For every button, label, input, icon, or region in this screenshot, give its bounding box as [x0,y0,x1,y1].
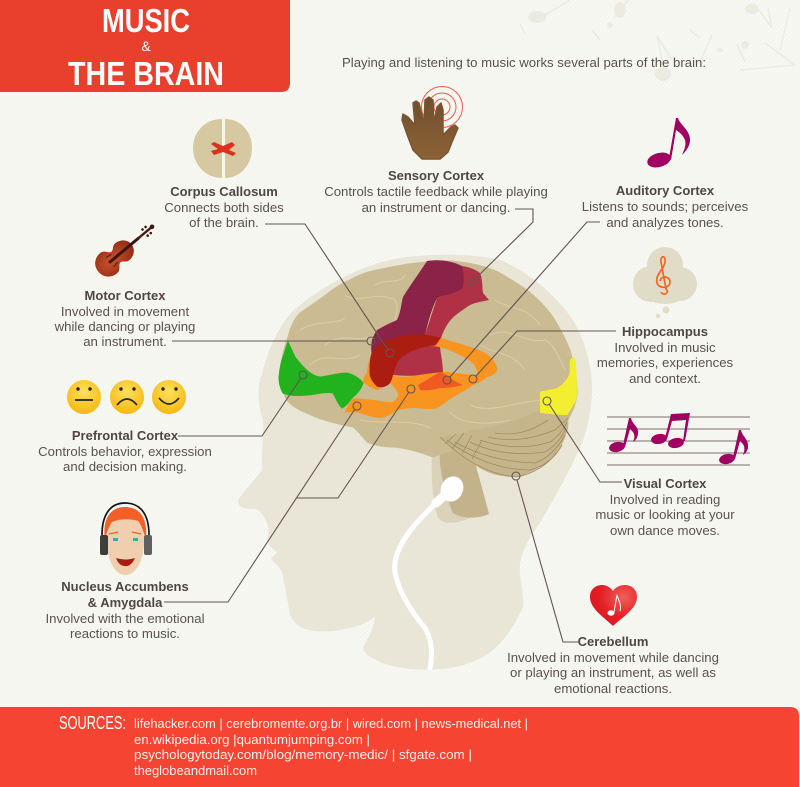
icon: hand with ripples [402,86,462,159]
label: nucleus accumbens and amygdala: reactions to music. [70,626,180,641]
region: auditory cortex (red-orange) [418,372,463,390]
leader line: corpus callosum [265,224,394,357]
leader line: nucleus accumbens [164,402,361,602]
label: sensory cortex: Sensory Cortex [388,168,485,183]
label: motor cortex [54,288,195,349]
icon: face with headphones [100,503,152,575]
label: hippocampus: Hippocampus [622,324,708,339]
icon: thought cloud with treble clef [633,247,697,318]
leader line: cerebellum [512,472,578,642]
icon: staff with notes [607,413,750,466]
label: auditory cortex: Listens to sounds; perceives [582,199,749,214]
label: sensory cortex: an instrument or dancing. [362,200,510,215]
label: nucleus accumbens and amygdala: Nucleus Accumbens [61,579,189,594]
label: motor cortex: Motor Cortex [85,288,166,303]
head silhouette [238,255,592,670]
earbud and cable [395,473,467,668]
icon: music note [646,118,690,170]
label: auditory cortex: and analyzes tones. [606,215,724,230]
label: hippocampus: memories, experiences [597,355,734,370]
brain folds [300,275,565,428]
beamed notes [650,413,690,449]
region: nucleus accumbens, amygdala and hippocampus (orange) [345,335,497,418]
intro text: Playing and listening to music works several parts of the brain: [342,55,706,70]
sources list: psychologytoday.com/blog/memory-medic/ | sfgate.com | [134,747,472,762]
region: motor and sensory cortex [371,260,489,376]
leader line: sensory cortex [468,209,533,286]
sources list [134,716,528,778]
leader line: hippocampus [469,331,616,383]
label: nucleus accumbens and amygdala [45,579,205,641]
footer: sources [0,707,799,787]
region: visual cortex (yellow) [540,358,577,415]
label: hippocampus: and context. [629,371,701,386]
label: auditory cortex [582,183,749,230]
title: MUSIC: MUSIC [102,2,190,39]
label: cerebellum: emotional reactions. [554,681,672,696]
leader line: auditory cortex [443,222,600,384]
label: motor cortex: Involved in movement [61,304,189,319]
label: prefrontal cortex: Controls behavior, expression [38,444,212,459]
label: visual cortex: Involved in reading [610,492,720,507]
label: hippocampus: Involved in music [614,340,716,355]
leader line: visual cortex [543,397,622,482]
neutral face [67,380,101,414]
leader line: prefrontal cortex [178,371,307,436]
happy face [152,380,186,414]
region: overlap (dark red) [370,335,440,387]
icon: split brain [193,119,252,178]
title banner [0,0,290,92]
title: ampersand: & [141,38,151,54]
icon: violin [90,215,162,282]
label: sensory cortex: Controls tactile feedback while playing [324,184,548,199]
label: cerebellum: Cerebellum [578,634,648,649]
brain [280,261,577,457]
label: corpus callosum: Connects both sides [164,200,284,215]
label: prefrontal cortex: Prefrontal Cortex [72,428,179,443]
label: corpus callosum: Corpus Callosum [170,184,278,199]
sources list: theglobeandmail.com [134,763,257,778]
note [608,418,638,454]
title: THE BRAIN: THE BRAIN [68,55,224,92]
label: visual cortex: Visual Cortex [624,476,707,491]
cerebellum [440,409,568,477]
icon: heart with note [590,585,637,626]
label: visual cortex: own dance moves. [610,523,720,538]
label: prefrontal cortex [38,428,212,474]
label: motor cortex: an instrument. [83,334,167,349]
label: cerebellum [507,634,719,696]
label: corpus callosum [164,184,284,230]
label: visual cortex: music or looking at your [595,507,735,522]
label: cerebellum: or playing an instrument, as well as [510,665,716,680]
sad face [110,380,144,414]
label: corpus callosum: of the brain. [189,215,259,230]
label: sensory cortex [324,168,548,215]
label: prefrontal cortex: and decision making. [63,459,187,474]
label: nucleus accumbens and amygdala: Involved with the emotional [45,611,205,626]
sources list: en.wikipedia.org |quantumjumping.com | [134,732,370,747]
label: hippocampus [597,324,734,386]
region: prefrontal cortex (green) [279,342,363,408]
label: visual cortex [595,476,735,538]
label: motor cortex: while dancing or playing [54,319,195,334]
leader line: amygdala [297,385,415,498]
label: auditory cortex: Auditory Cortex [616,183,715,198]
icon: faces [67,380,186,414]
label: nucleus accumbens and amygdala: & Amygdala [88,595,163,610]
sources heading: SOURCES: [59,713,126,733]
sources list: lifehacker.com | cerebromente.org.br | wired.com | news-medical.net | [134,716,528,731]
note [718,430,748,466]
leader line: motor cortex [172,337,375,345]
label: cerebellum: Involved in movement while dancing [507,650,719,665]
brain stem [432,433,489,523]
